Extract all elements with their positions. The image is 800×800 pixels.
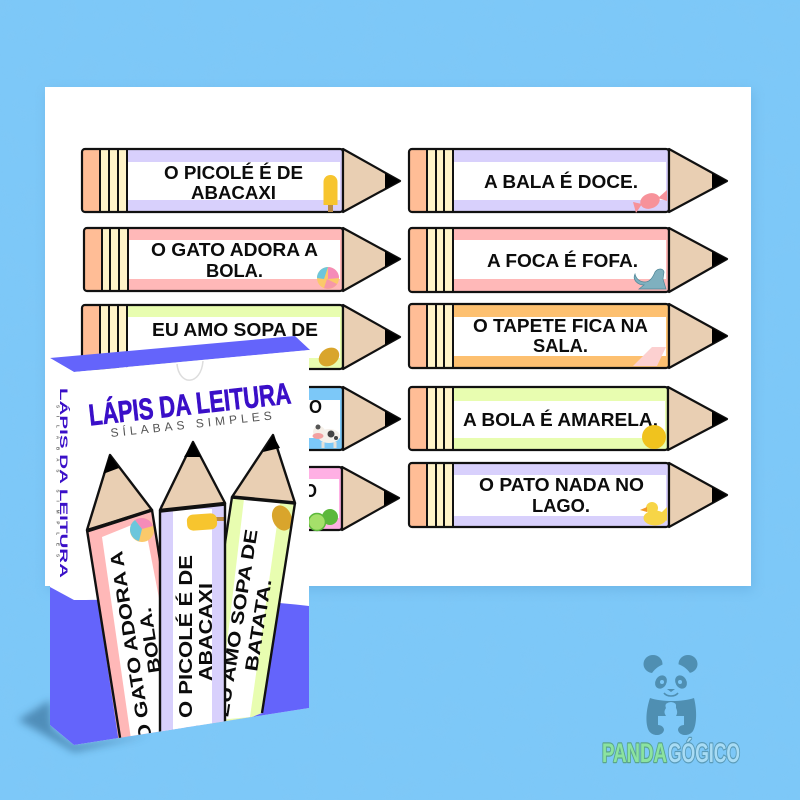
logo wordmark: GÓGICO (668, 737, 740, 768)
icon: candy (633, 190, 667, 213)
left pencil text: BOLA. (135, 606, 165, 675)
pencil: A bola é amarela: A BOLA É AMARELA. (463, 409, 658, 430)
pencil: O picolé é de abacaxi (82, 148, 400, 213)
icon: yellow ball (642, 425, 666, 449)
icon: rug (633, 347, 666, 366)
logo wordmark (602, 737, 740, 768)
pencil: partly hidden, cow (82, 387, 400, 450)
centre pencil text (176, 556, 212, 718)
icon: limes (308, 509, 338, 530)
box pencil: right (195, 435, 296, 740)
pencil: O tapete fica na sala: O TAPETE FICA NA (473, 316, 648, 336)
icon: seal (634, 269, 666, 289)
box pencil: centre (160, 442, 225, 740)
pencil: O pato nada no lago: O PATO NADA NO (479, 475, 644, 495)
box pencil: left (87, 455, 190, 760)
left pencil text: O GATO ADORA A (106, 550, 156, 743)
box shadow (18, 700, 150, 752)
logo wordmark: PANDA (602, 738, 667, 768)
box title: LÁPIS DA LEITURA (87, 376, 293, 432)
box front face (74, 350, 309, 745)
pencil: O tapete fica na sala: SALA. (533, 336, 588, 356)
pencil: A bala é doce: A BALA É DOCE. (484, 171, 638, 192)
pencil: O gato adora a bola: BOLA. (206, 261, 263, 281)
card box (50, 336, 310, 760)
pencil: A foca é fofa (409, 227, 727, 292)
pencil: Eu amo sopa de batata: EU AMO SOPA DE (152, 320, 318, 340)
pencil: partly hidden, lime: O (304, 481, 317, 501)
pencil: partly hidden, lime (82, 467, 399, 530)
panel: white sheet (45, 87, 753, 590)
pencil: A foca é fofa: A FOCA É FOFA. (487, 250, 638, 271)
pencil: A bala é doce (409, 148, 727, 213)
icon: duck (640, 502, 667, 526)
right pencil text: BATATA. (241, 578, 275, 673)
potato icon (272, 505, 292, 531)
pencil: O picolé é de abacaxi: ABACAXI (191, 183, 276, 203)
pencil: O gato adora a bola (84, 227, 400, 292)
box left side (50, 358, 74, 745)
centre pencil text: O PICOLÉ É DE (175, 555, 196, 718)
right pencil text (226, 530, 272, 716)
icon: potato (315, 344, 343, 370)
popsicle icon (186, 513, 225, 531)
pencil: O picolé é de abacaxi: O PICOLÉ É DE (164, 162, 303, 183)
pencil: O pato nada no lago: LAGO. (532, 496, 590, 516)
icon: popsicle (324, 175, 338, 212)
pencil: A bola é amarela (409, 386, 727, 450)
box subtitle: SÍLABAS SIMPLES (110, 408, 272, 440)
panda icon (644, 655, 698, 735)
box top face (50, 336, 310, 372)
side subtitle: SÍLABAS SIMPLES (56, 405, 62, 557)
pencil: O tapete fica na sala (409, 303, 727, 368)
pencil: partly hidden, cow: O (309, 397, 322, 417)
pencil: O pato nada no lago (409, 462, 727, 527)
centre pencil text: ABACAXI (196, 583, 216, 681)
logo: Pandagógico (602, 655, 740, 768)
box pencils (87, 435, 296, 760)
pencil: O gato adora a bola: O GATO ADORA A (151, 240, 318, 260)
icon: cow (312, 424, 340, 448)
ball icon (130, 518, 154, 542)
right pencil text: EU AMO SOPA DE (212, 528, 262, 719)
pencil: Eu amo sopa de batata (82, 304, 400, 370)
icon: beach ball (317, 267, 339, 289)
side title: LÁPIS DA LEITURA (57, 388, 70, 578)
